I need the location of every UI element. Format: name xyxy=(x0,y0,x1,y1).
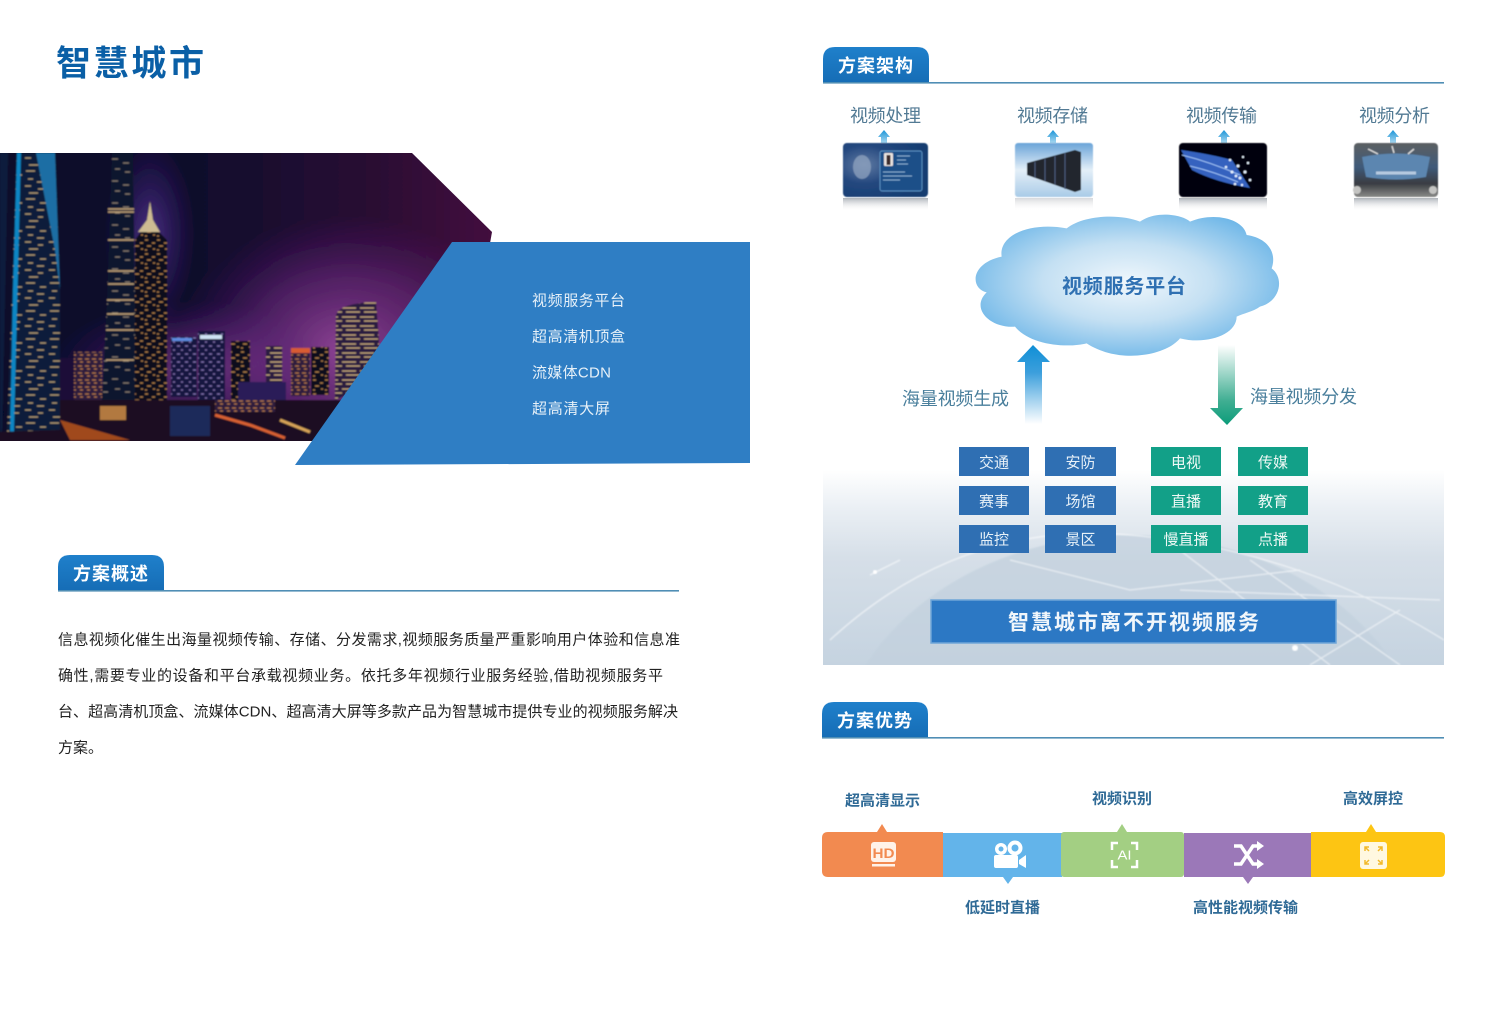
section heading: advantages xyxy=(822,702,1444,739)
column: video processing: 视频处理 xyxy=(850,106,921,126)
icon: HD: HD xyxy=(872,845,894,861)
column: video storage: 视频存储 xyxy=(1017,106,1088,126)
source tags: blue: 赛事 xyxy=(979,494,1009,510)
overview body text: 信息视频化催生出海量视频传输、存储、分发需求,视频服务质量严重影响用户体验和信息准 xyxy=(58,632,680,648)
label: distribution: 海量视频分发 xyxy=(1250,387,1357,407)
column: video transmission xyxy=(1179,106,1267,211)
icon: AI frame: AI xyxy=(1118,848,1132,862)
city night photo xyxy=(0,153,492,441)
distribution tags: green: 传媒 xyxy=(1258,454,1288,472)
distribution tags: green: 教育 xyxy=(1258,494,1288,510)
product list: 流媒体CDN xyxy=(532,364,611,382)
section heading: overview: 方案概述 xyxy=(73,563,148,584)
distribution tags: green: 慢直播 xyxy=(1163,532,1209,548)
banner: 智慧城市离不开视频服务 xyxy=(1008,610,1259,634)
blue product panel xyxy=(295,242,750,465)
advantage: efficient screen control: 高效屏控 xyxy=(1343,790,1403,808)
product list xyxy=(532,292,625,418)
overview body text: 确性,需要专业的设备和平台承载视频业务。依托多年视频行业服务经验,借助视频服务平 xyxy=(58,668,663,684)
advantage: high-performance transmission xyxy=(1184,833,1311,916)
column: video analysis xyxy=(1353,106,1438,211)
section heading: architecture xyxy=(823,47,1444,84)
section heading: architecture: 方案架构 xyxy=(838,55,913,76)
source tags: blue: 场馆 xyxy=(1065,494,1096,510)
product list: 视频服务平台 xyxy=(532,292,625,310)
source tags: blue: 安防 xyxy=(1065,454,1096,472)
product list: 超高清机顶盒 xyxy=(532,328,625,346)
column: video storage xyxy=(1015,106,1093,211)
section heading: overview xyxy=(58,555,679,592)
cloud: video service platform xyxy=(976,215,1279,356)
column: video processing xyxy=(843,106,928,211)
advantage: efficient screen control xyxy=(1311,790,1445,877)
cloud: video service platform: 视频服务平台 xyxy=(1062,274,1186,298)
distribution tags: green: 电视 xyxy=(1171,454,1201,472)
advantage: ultra HD xyxy=(822,792,943,877)
icon: fullscreen xyxy=(1360,842,1387,869)
advantage: video recognition: 视频识别 xyxy=(1092,790,1152,808)
source tags: blue: 交通 xyxy=(979,454,1009,472)
advantage: ultra HD: 超高清显示 xyxy=(845,792,920,810)
column: video transmission: 视频传输 xyxy=(1186,106,1257,126)
column: video analysis: 视频分析 xyxy=(1359,106,1430,126)
distribution tags: green: 直播 xyxy=(1171,494,1201,510)
arrow: down, distribution xyxy=(1210,345,1243,425)
icon: shuffle xyxy=(1234,841,1264,869)
advantage: low latency xyxy=(943,833,1062,916)
label: generation: 海量视频生成 xyxy=(902,389,1009,409)
section heading: advantages: 方案优势 xyxy=(837,710,912,731)
source tags: blue: 监控 xyxy=(979,532,1009,548)
icon: camera xyxy=(994,840,1026,868)
overview body text: 方案。 xyxy=(58,738,103,756)
product list: 超高清大屏 xyxy=(532,400,610,418)
source tags: blue: 景区 xyxy=(1065,532,1096,548)
banner xyxy=(931,600,1336,643)
title: 智慧城市 xyxy=(56,44,204,84)
distribution tags: green: 点播 xyxy=(1258,532,1288,548)
distribution tags: green xyxy=(1151,447,1308,553)
advantage: video recognition xyxy=(1061,790,1184,877)
globe background xyxy=(823,485,1444,665)
advantage: low latency: 低延时直播 xyxy=(965,898,1040,916)
advantage: high-performance transmission: 高性能视频传输 xyxy=(1193,898,1298,916)
overview body text xyxy=(58,632,680,756)
source tags: blue xyxy=(959,447,1116,553)
overview body text: 台、超高清机顶盒、流媒体CDN、超高清大屏等多款产品为智慧城市提供专业的视频服务解决 xyxy=(58,702,678,720)
arrow: up, generation xyxy=(1017,345,1050,424)
